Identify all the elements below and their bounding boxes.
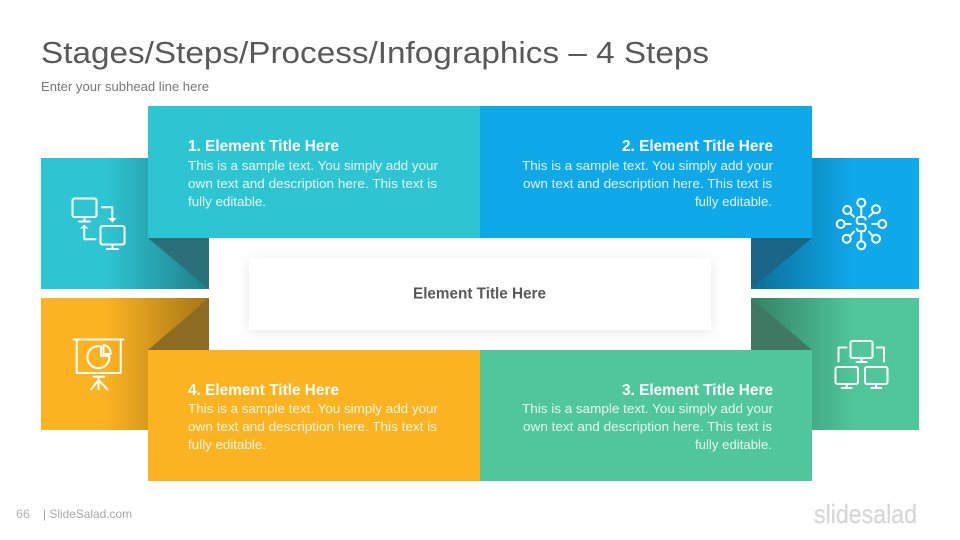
- panel: step 2: [480, 106, 812, 238]
- text block: step 1: This is a sample text. You simply add your: [188, 159, 438, 173]
- text block: step 2: own text and description here. This text is: [523, 177, 772, 191]
- text block: step 4: [188, 402, 438, 452]
- heading: step 4: 4. Element Title Here: [188, 382, 339, 399]
- panel: step 4 side tab: [41, 298, 209, 430]
- fold shadow: step 2: [751, 238, 812, 289]
- text block: step 3: own text and description here. This text is: [523, 420, 772, 434]
- icon: connected monitors: [836, 341, 888, 388]
- panel: step 1: [148, 106, 480, 238]
- text block: step 3: This is a sample text. You simply add your: [522, 402, 773, 416]
- text block: step 3: [522, 402, 773, 452]
- icon: swapping monitors: [72, 198, 124, 249]
- subhead: Enter your subhead line here: [41, 80, 209, 94]
- panel: center card: [249, 258, 711, 332]
- heading: step 3: 3. Element Title Here: [622, 382, 773, 399]
- text block: step 1: fully editable.: [188, 195, 266, 209]
- footer: site name: | SlideSalad.com: [43, 507, 132, 521]
- panel: step 2 side tab: [751, 158, 919, 289]
- panel: step 3 side tab: [751, 298, 919, 430]
- text block: step 4: This is a sample text. You simply add your: [188, 402, 438, 416]
- title: Stages/Steps/Process/Infographics – 4 Steps: [41, 35, 709, 70]
- panel: step 4: [148, 350, 480, 481]
- text block: step 2: fully editable.: [695, 195, 772, 209]
- icon: dollar network: [837, 199, 886, 249]
- icon: presentation board: [74, 340, 124, 389]
- text block: step 4: fully editable.: [188, 438, 266, 452]
- heading: step 1: 1. Element Title Here: [188, 138, 339, 155]
- text block: step 2: This is a sample text. You simply add your: [522, 159, 773, 173]
- heading: step 2: 2. Element Title Here: [622, 138, 773, 155]
- panel: step 3: [480, 350, 812, 481]
- fold shadow: step 4: [148, 298, 209, 350]
- fold shadow: step 3: [751, 298, 812, 350]
- text block: step 1: own text and description here. This text is: [188, 177, 437, 191]
- logo: slidesalad: [814, 499, 917, 529]
- heading: center card: Element Title Here: [413, 286, 546, 302]
- fold shadow: step 1: [148, 238, 209, 289]
- text block: step 4: own text and description here. This text is: [188, 420, 437, 434]
- text block: step 3: fully editable.: [695, 438, 772, 452]
- text block: step 1: [188, 159, 438, 209]
- footer: page number: 66: [16, 507, 30, 521]
- text block: step 2: [522, 159, 773, 209]
- panel: step 1 side tab: [41, 158, 209, 289]
